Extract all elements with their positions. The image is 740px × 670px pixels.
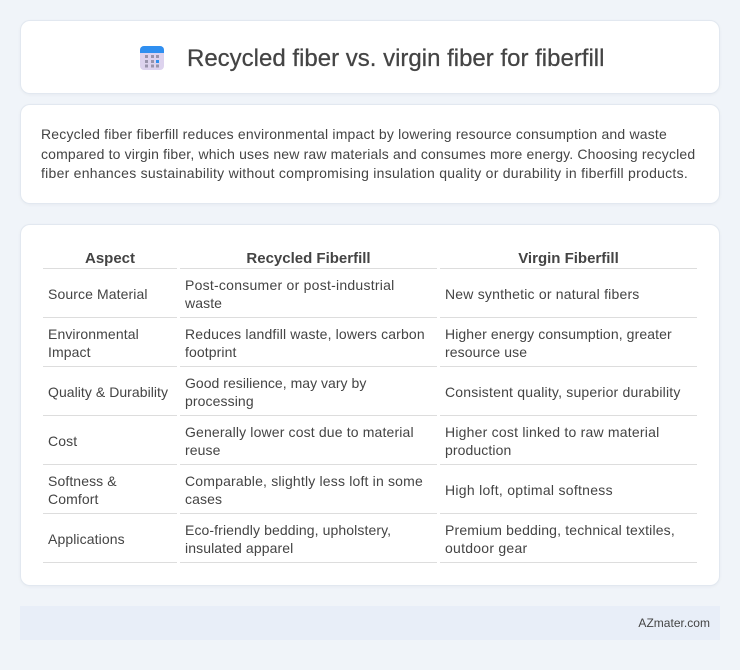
softness recycled: Comparable, slightly less loft in some	[185, 473, 423, 489]
softness recycled	[185, 473, 423, 507]
environmental virgin: resource use	[445, 344, 527, 360]
quality recycled	[185, 375, 366, 409]
row: source material: Source Material	[48, 286, 148, 302]
row: quality and durability: Quality & Durability	[48, 384, 168, 400]
row: applications: Applications	[48, 531, 125, 547]
table header: recycled	[180, 250, 437, 269]
source material recycled: Post-consumer or post-industrial	[185, 277, 395, 293]
applications virgin: Premium bedding, technical textiles,	[445, 522, 675, 538]
environmental virgin	[445, 326, 672, 360]
table header: virgin: Virgin Fiberfill	[518, 250, 619, 267]
table header: aspect: Aspect	[85, 250, 135, 267]
footer credit: AZmater.com	[638, 616, 710, 630]
applications virgin: outdoor gear	[445, 540, 527, 556]
quality recycled: processing	[185, 393, 254, 409]
intro text: compared to virgin fiber, which uses new raw materials and consumes more energy. Choosing recycled	[41, 146, 695, 162]
cost recycled	[185, 424, 414, 458]
environmental recycled	[185, 326, 425, 360]
applications recycled: insulated apparel	[185, 540, 293, 556]
table header: aspect	[43, 250, 177, 269]
intro text: Recycled fiber fiberfill reduces environmental impact by lowering resource consumption and waste	[41, 126, 667, 142]
cost recycled: Generally lower cost due to material	[185, 424, 414, 440]
title: Recycled fiber vs. virgin fiber for fiberfill	[187, 45, 604, 72]
table panel	[20, 224, 720, 586]
environmental recycled: Reduces landfill waste, lowers carbon	[185, 326, 425, 342]
quality virgin: Consistent quality, superior durability	[445, 384, 681, 400]
row: environmental impact: Environmental	[48, 326, 139, 342]
intro panel	[20, 104, 720, 204]
row: softness and comfort: Comfort	[48, 491, 98, 507]
cost virgin: production	[445, 442, 511, 458]
row: environmental impact: Impact	[48, 344, 91, 360]
row: cost: Cost	[48, 433, 77, 449]
row: softness and comfort	[48, 473, 117, 507]
source material recycled	[185, 277, 395, 311]
applications recycled: Eco-friendly bedding, upholstery,	[185, 522, 391, 538]
footer bar	[20, 606, 720, 640]
cost recycled: reuse	[185, 442, 221, 458]
environmental recycled: footprint	[185, 344, 236, 360]
table header: virgin	[440, 250, 697, 269]
intro text: fiber enhances sustainability without compromising insulation quality or durability in fiberfill products.	[41, 165, 688, 181]
row: softness and comfort: Softness &	[48, 473, 117, 489]
environmental virgin: Higher energy consumption, greater	[445, 326, 672, 342]
table header: recycled: Recycled Fiberfill	[246, 250, 371, 267]
title card	[20, 20, 720, 94]
applications virgin	[445, 522, 675, 556]
intro text	[41, 126, 695, 181]
cost virgin	[445, 424, 659, 458]
source material virgin: New synthetic or natural fibers	[445, 286, 640, 302]
row: environmental impact	[48, 326, 139, 360]
icon: calendar	[140, 46, 164, 70]
source material recycled: waste	[185, 295, 222, 311]
softness virgin: High loft, optimal softness	[445, 482, 613, 498]
applications recycled	[185, 522, 391, 556]
softness recycled: cases	[185, 491, 222, 507]
cost virgin: Higher cost linked to raw material	[445, 424, 659, 440]
quality recycled: Good resilience, may vary by	[185, 375, 366, 391]
